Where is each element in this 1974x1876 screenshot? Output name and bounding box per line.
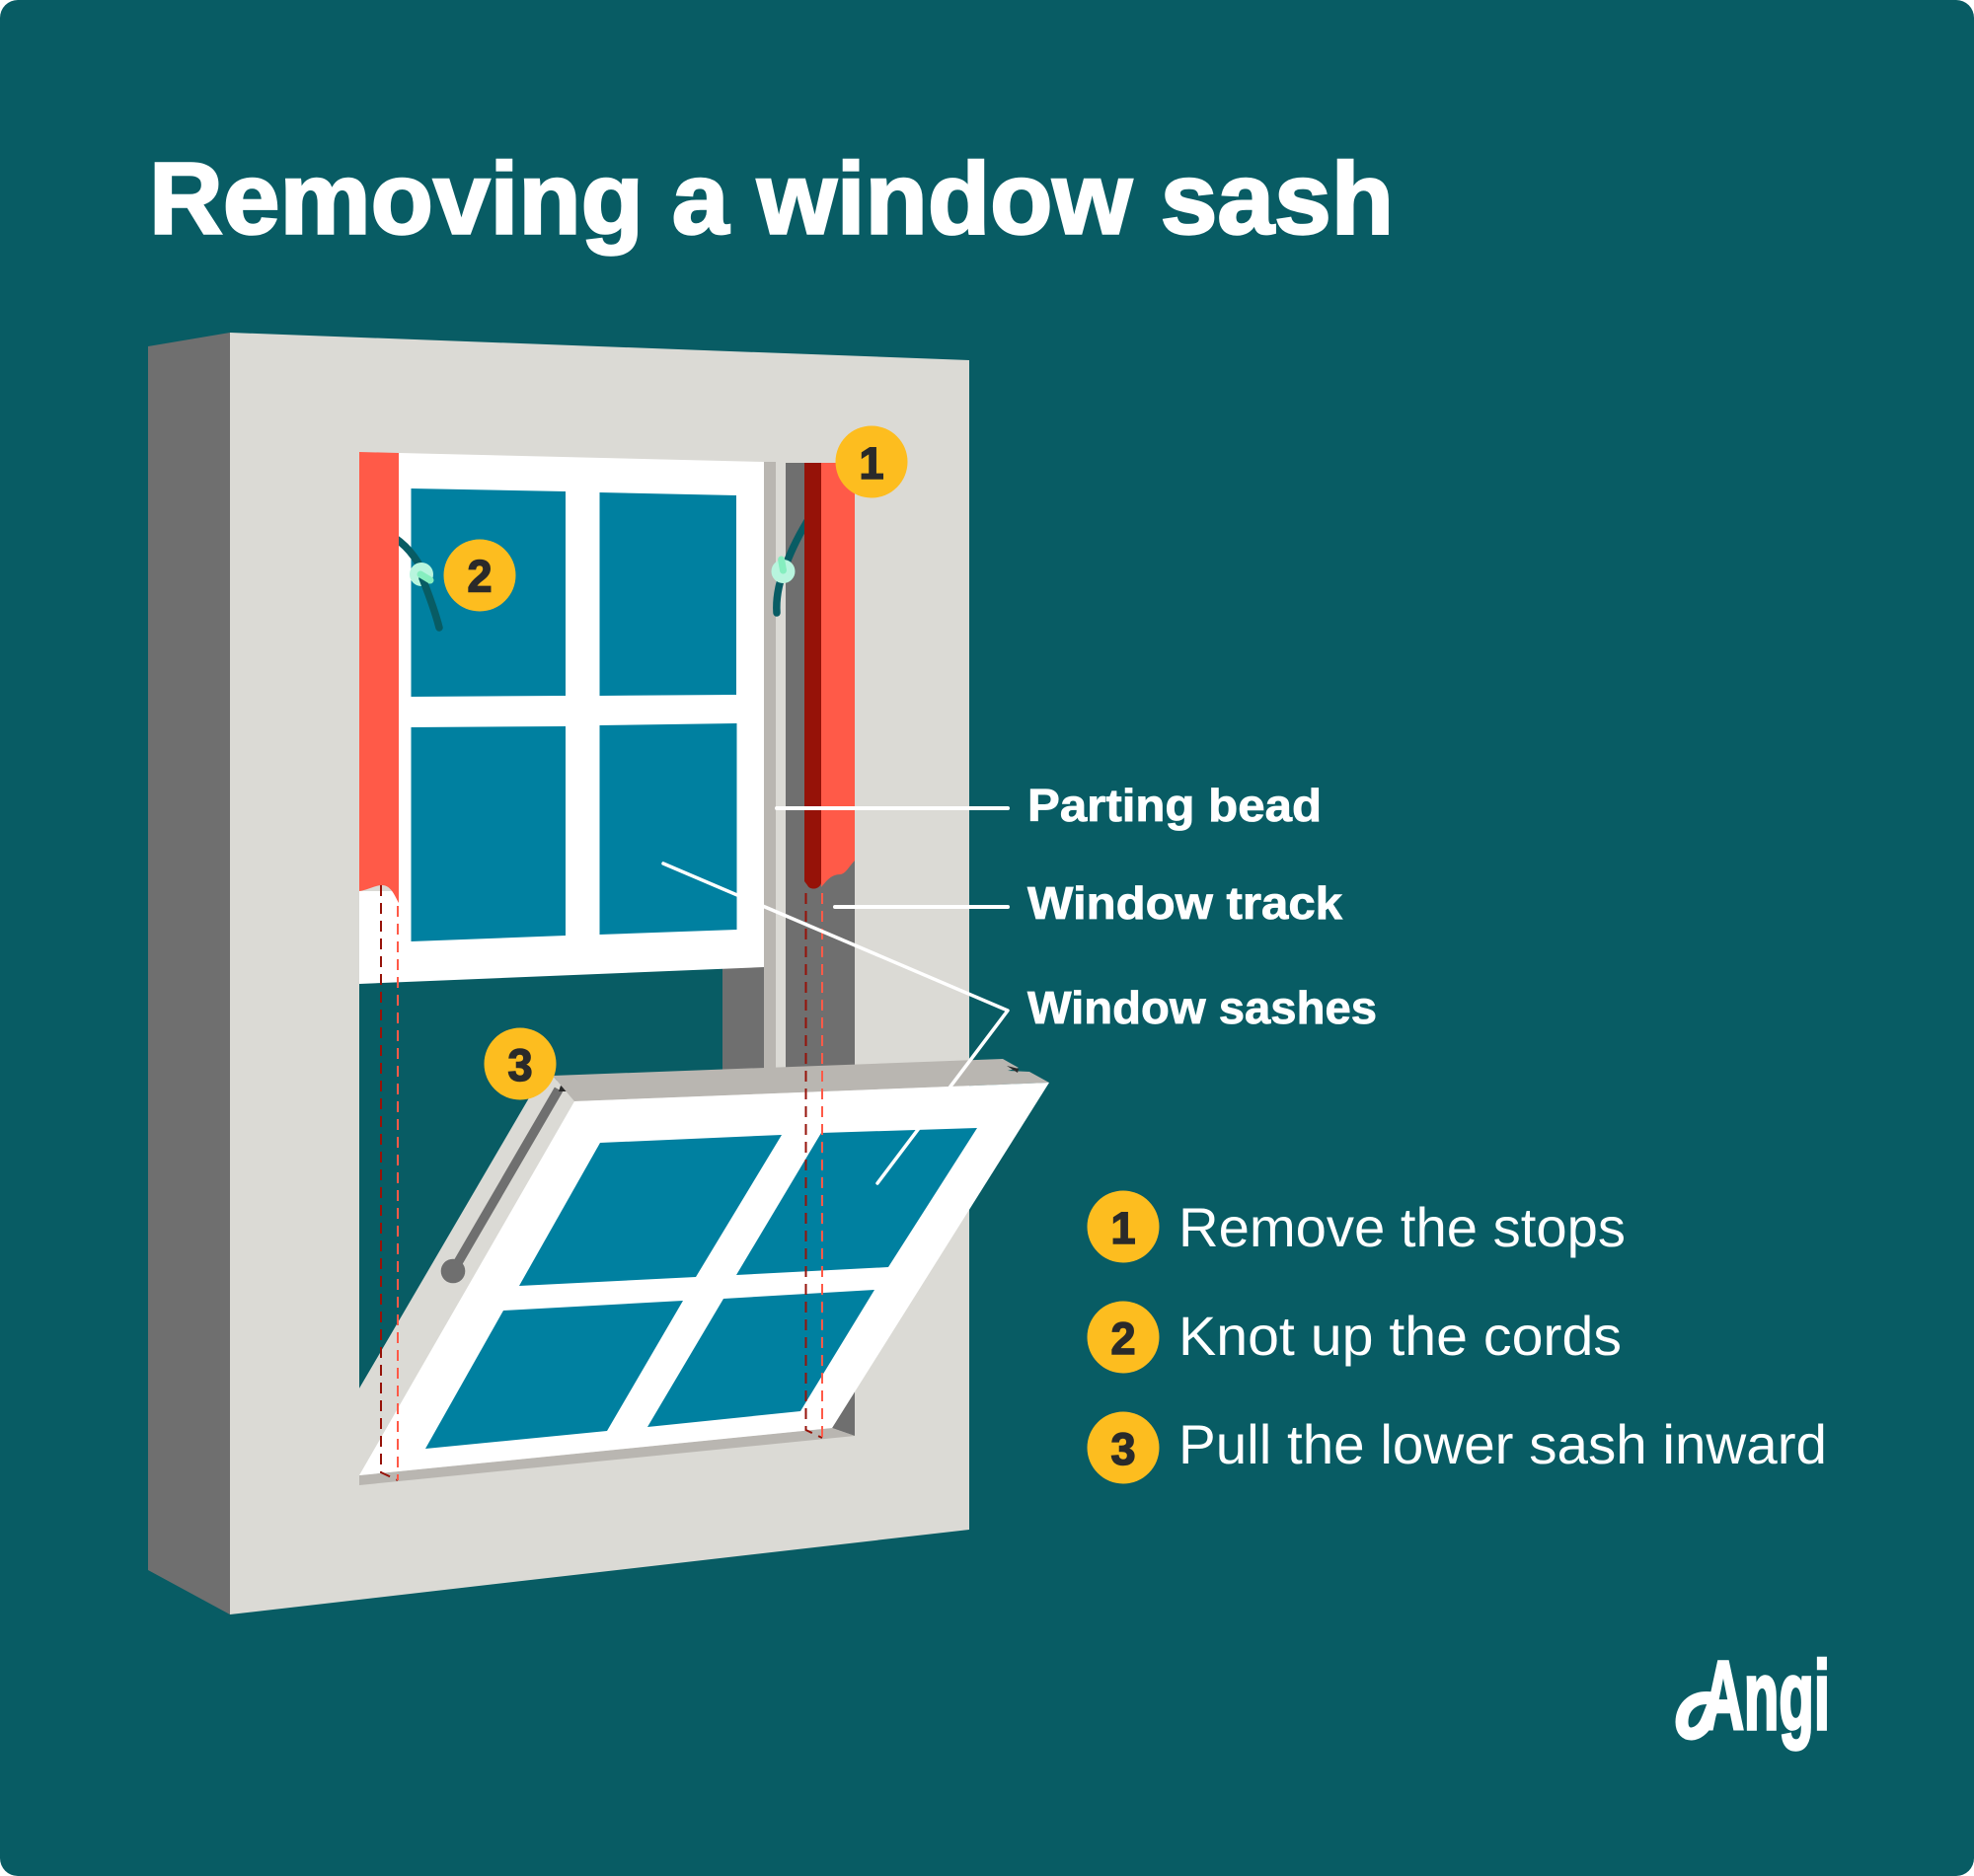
upper left pane [411,488,566,697]
left cord with knot [395,538,439,628]
rod end [441,1259,465,1283]
tilted pane upper right [736,1128,977,1275]
label: window track: Window track [1027,877,1342,929]
parting bead [764,462,776,1076]
right notch [1007,1066,1019,1073]
legend item 3: 3 [1110,1424,1136,1474]
dashed guide lines [381,885,822,1480]
tilted pane upper left [519,1135,782,1286]
leader line: window track [835,905,1008,909]
sash side rod [453,1089,559,1271]
title: Removing a window sash [149,142,1394,255]
right cord with knot [772,521,807,613]
lower sash top edge [553,1059,1049,1101]
exposed track behind upper sash [722,962,766,1076]
legend item 1: Remove the stops [1178,1196,1626,1258]
tilted pane lower left [425,1301,683,1449]
legend item 1: 1 [1110,1203,1136,1253]
badge 1 on window: 1 [859,438,884,488]
logo: Angi [1682,1641,1830,1750]
lower sash tilted inward [359,1059,1049,1485]
left notch [559,1086,570,1091]
badge 3 on window [484,1028,557,1099]
lower left pane [411,726,566,941]
badge 1 on window [835,426,908,497]
right stop dark side [804,463,821,889]
badge 2 on window: 2 [467,551,493,602]
lower sash far shadow [832,1391,855,1436]
legend item 2: Knot up the cords [1178,1305,1622,1367]
window illustration [148,333,1049,1614]
lower sash left side [359,1076,574,1475]
right stop removed coral [821,463,855,887]
label: window sashes: Window sashes [1027,982,1377,1033]
upper right pane [600,492,736,696]
legend item 2: 2 [1110,1313,1136,1364]
leader line: parting bead [777,806,1008,810]
wall front face [230,333,969,1614]
label: parting bead: Parting bead [1027,780,1322,831]
lower right pane [600,723,736,935]
upper sash [359,453,764,984]
window track [786,463,855,1075]
upper sash frame [359,453,764,984]
logo: Angi: Angi [1703,1641,1830,1750]
leader line: window sashes [663,863,1008,1183]
legend item 3: Pull the lower sash inward [1178,1413,1827,1475]
opening showing outdoors [359,962,722,1388]
badge 2 on window [444,539,515,612]
left stop coral [359,452,399,903]
lower sash frame [359,1083,1049,1475]
wall side face [148,333,230,1614]
legend [1088,1190,1827,1484]
tilted pane lower right [647,1290,874,1427]
lower sash bottom edge [359,1428,855,1485]
legend item 2 [1088,1301,1622,1374]
badge 3 on window: 3 [507,1040,533,1090]
